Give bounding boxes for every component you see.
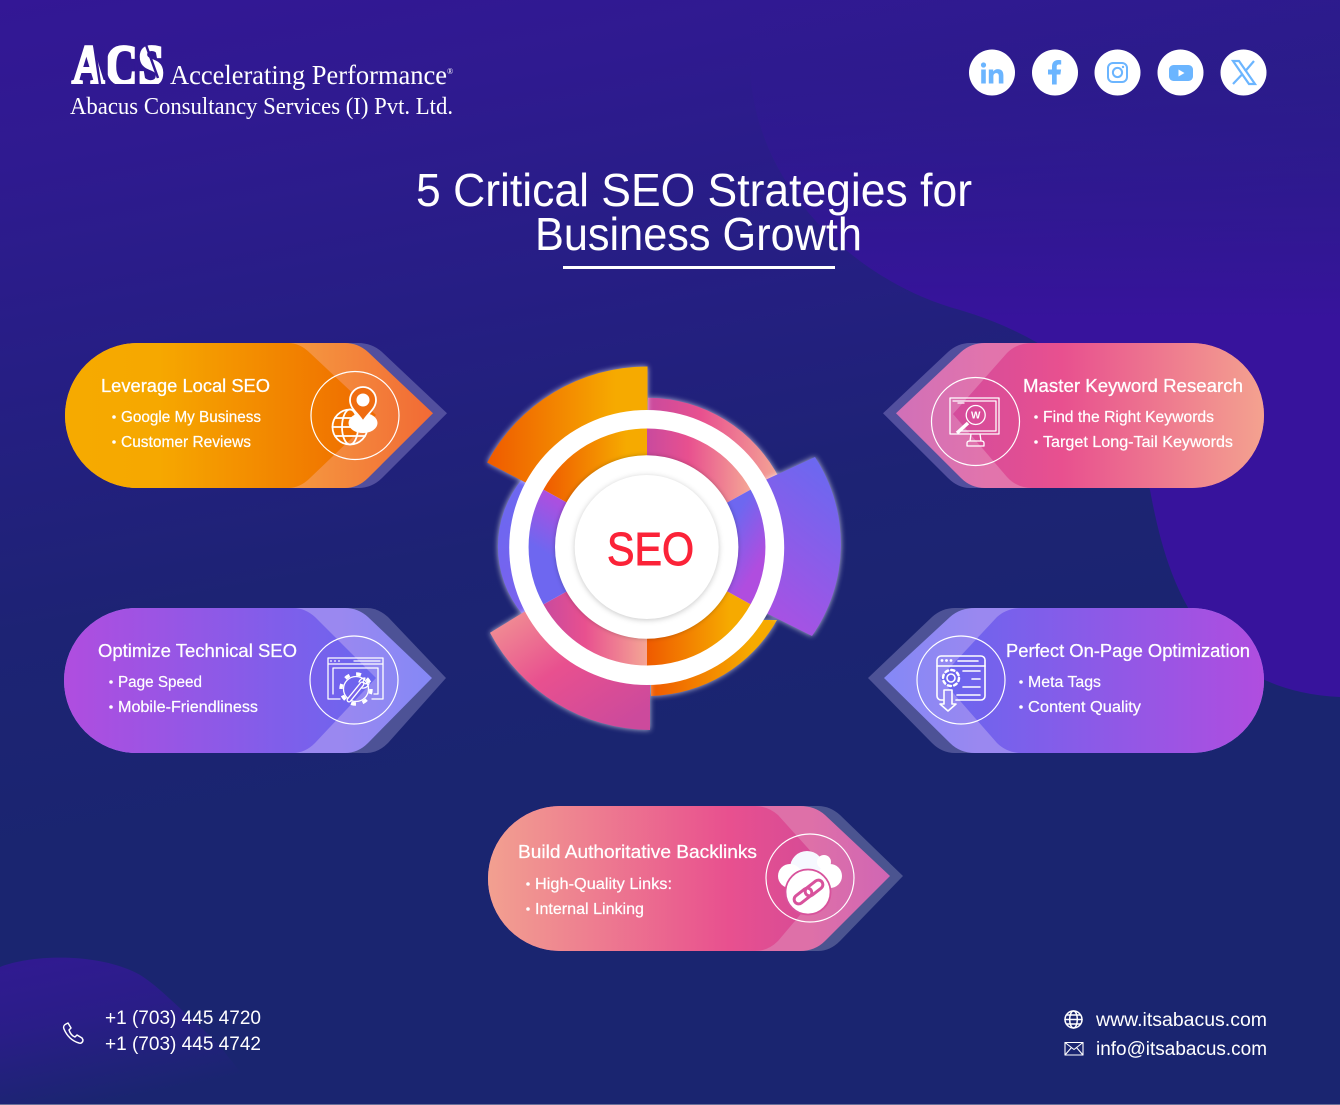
icon: facebook: [1032, 50, 1078, 96]
bullet list: [1019, 674, 1141, 716]
bullet list: Page Speed: [118, 674, 202, 691]
heading: Build Authoritative Backlinks: [518, 841, 757, 862]
SEO label: SEO: [607, 523, 694, 575]
icon: globe and pin: [311, 372, 399, 460]
bullet list: Find the Right Keywords: [1043, 409, 1214, 426]
white ring: [509, 410, 784, 685]
icon: x: [1220, 50, 1266, 96]
heading: Optimize Technical SEO: [98, 640, 297, 661]
inner colored ring: [529, 428, 765, 666]
card: Build Authoritative Backlinks: [488, 806, 903, 951]
icon: window with gear and wrench: [310, 636, 398, 724]
web and email contact: www.itsabacus.com: [1095, 1010, 1267, 1031]
heading: Perfect On-Page Optimization: [1006, 640, 1250, 661]
icon: phone: [64, 1023, 83, 1043]
card: Optimize Technical SEO: [64, 608, 446, 753]
bullet list: Google My Business: [121, 409, 261, 426]
bullet list: [526, 876, 672, 918]
bullet list: [1034, 409, 1233, 451]
card: Perfect On-Page Optimization: [868, 608, 1264, 753]
icon: instagram: [1094, 50, 1140, 96]
logo: ®: [447, 67, 453, 76]
phone contact: +1 (703) 445 4742: [105, 1034, 261, 1055]
title: 5 Critical SEO Strategies for: [416, 164, 972, 216]
logo: ACS: [72, 35, 164, 97]
title: [416, 164, 972, 269]
bullet list: Meta Tags: [1028, 674, 1101, 691]
center SEO diagram: [487, 366, 841, 730]
icon: cloud with link: [766, 834, 854, 922]
inner white discs: [555, 455, 738, 639]
card: Leverage Local SEO: [65, 343, 447, 488]
card: Master Keyword Research: [883, 343, 1264, 488]
bullet list: High-Quality Links:: [535, 876, 672, 893]
bullet list: [112, 409, 261, 451]
title: Business Growth: [535, 208, 862, 260]
icon: monitor with magnifier: W: [971, 410, 981, 422]
icon: globe: [1065, 1011, 1082, 1028]
heading: Master Keyword Research: [1023, 375, 1243, 396]
icon: window with gear and download arrow: [917, 636, 1005, 724]
web and email contact: info@itsabacus.com: [1096, 1039, 1267, 1060]
bullet list: [109, 674, 258, 716]
bullet list: Customer Reviews: [121, 434, 251, 451]
phone contact: +1 (703) 445 4720: [105, 1008, 261, 1029]
logo: [70, 45, 453, 120]
icon: linkedin: [969, 50, 1015, 96]
bullet list: Internal Linking: [535, 901, 644, 918]
thin outer arcs: [498, 398, 780, 696]
icon: envelope: [1065, 1042, 1083, 1055]
bullet list: Target Long-Tail Keywords: [1043, 434, 1233, 451]
heading: Leverage Local SEO: [101, 375, 270, 396]
logo: Accelerating Performance: [170, 60, 447, 90]
bullet list: Content Quality: [1028, 699, 1141, 716]
phone contact: [64, 1008, 261, 1055]
bullet list: Mobile-Friendliness: [118, 699, 258, 716]
social icons: [969, 50, 1266, 96]
icon: monitor with magnifier: [932, 378, 1020, 466]
big outer sectors: [487, 366, 841, 730]
icon: youtube: [1158, 50, 1204, 96]
logo: Abacus Consultancy Services (I) Pvt. Ltd.: [70, 94, 453, 120]
web and email contact: [1065, 1010, 1267, 1060]
